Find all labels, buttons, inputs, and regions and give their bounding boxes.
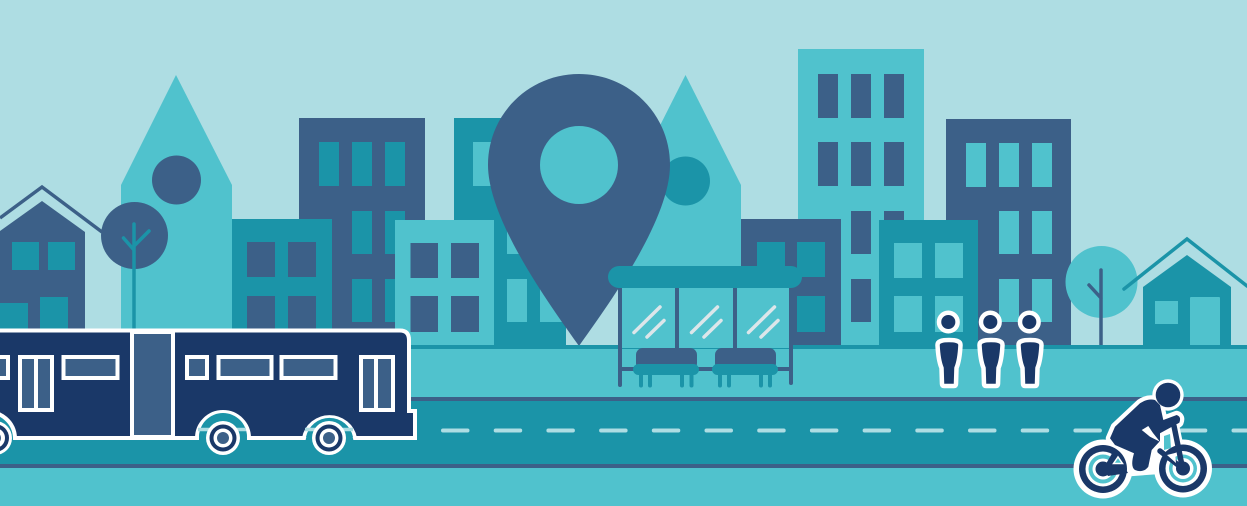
left house	[0, 187, 102, 330]
cyclist	[1074, 379, 1212, 498]
white silhouette	[1074, 379, 1212, 498]
bus shelter	[608, 266, 802, 387]
left church tower	[121, 75, 232, 332]
bus windows	[0, 357, 393, 410]
wheel left	[0, 421, 12, 455]
person 1	[938, 313, 960, 386]
map location pin	[488, 74, 670, 346]
left tree	[101, 202, 168, 330]
waiting people	[938, 313, 1042, 386]
bike frame	[1103, 426, 1182, 476]
rider figure	[1110, 383, 1180, 471]
teal building right	[879, 220, 978, 347]
articulated bus	[0, 330, 415, 455]
person 3	[1018, 313, 1042, 386]
blue building left	[299, 118, 425, 333]
light building	[395, 220, 494, 346]
teal building left	[232, 219, 332, 332]
wheel centre	[206, 421, 240, 455]
blue building centre right	[741, 219, 841, 347]
ground and road	[0, 345, 1247, 506]
tall light building	[798, 49, 924, 347]
articulation joint	[132, 332, 173, 437]
left wheel	[1079, 445, 1127, 493]
bus body	[0, 330, 415, 438]
benches	[633, 348, 778, 386]
wheel right	[312, 421, 346, 455]
right church tower	[630, 75, 741, 347]
teal building behind pin	[454, 118, 566, 347]
right tree	[1066, 246, 1138, 347]
person 2	[980, 313, 1002, 386]
blue building right	[946, 119, 1071, 347]
right wheel	[1159, 444, 1207, 492]
wheels	[0, 421, 346, 455]
right house	[1124, 239, 1247, 347]
wheel arches	[198, 413, 353, 437]
